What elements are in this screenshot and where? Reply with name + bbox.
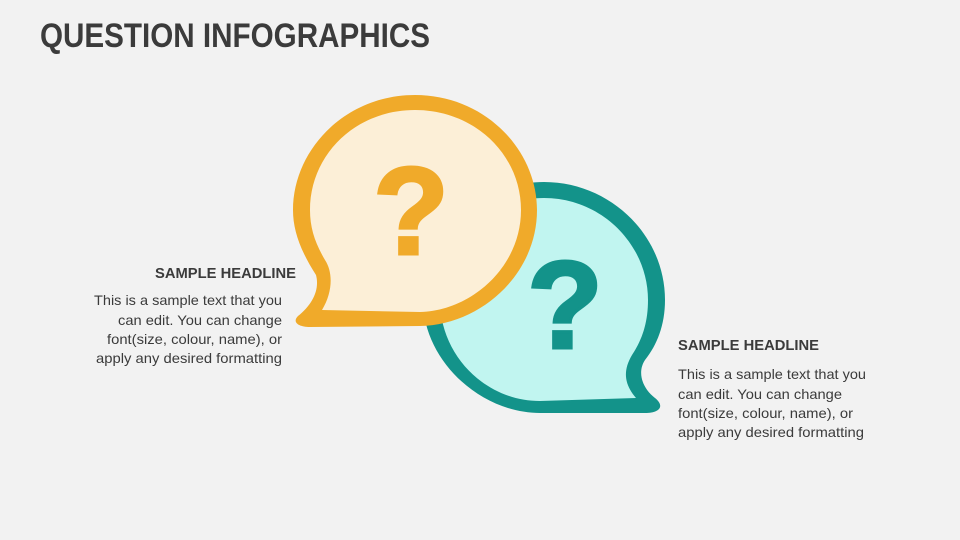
right text block	[678, 338, 866, 440]
right body text: apply any desired formatting	[678, 424, 864, 440]
left body text: apply any desired formatting	[96, 350, 282, 366]
left text block	[94, 266, 296, 366]
right body text	[678, 366, 866, 440]
title: QUESTION INFOGRAPHICS	[40, 17, 430, 55]
icon: orange question mark: ?	[373, 143, 449, 281]
left body text	[94, 292, 282, 366]
icon: teal question mark: ?	[527, 237, 603, 375]
left body text: This is a sample text that you	[94, 292, 282, 308]
left body text: can edit. You can change	[118, 312, 282, 328]
right body text: can edit. You can change	[678, 386, 842, 402]
teal speech bubble	[423, 182, 665, 413]
left body text: font(size, colour, name), or	[107, 331, 282, 347]
orange speech bubble	[293, 95, 537, 327]
left headline: SAMPLE HEADLINE	[155, 266, 296, 282]
right body text: font(size, colour, name), or	[678, 405, 853, 421]
right body text: This is a sample text that you	[678, 366, 866, 382]
right headline: SAMPLE HEADLINE	[678, 338, 819, 354]
